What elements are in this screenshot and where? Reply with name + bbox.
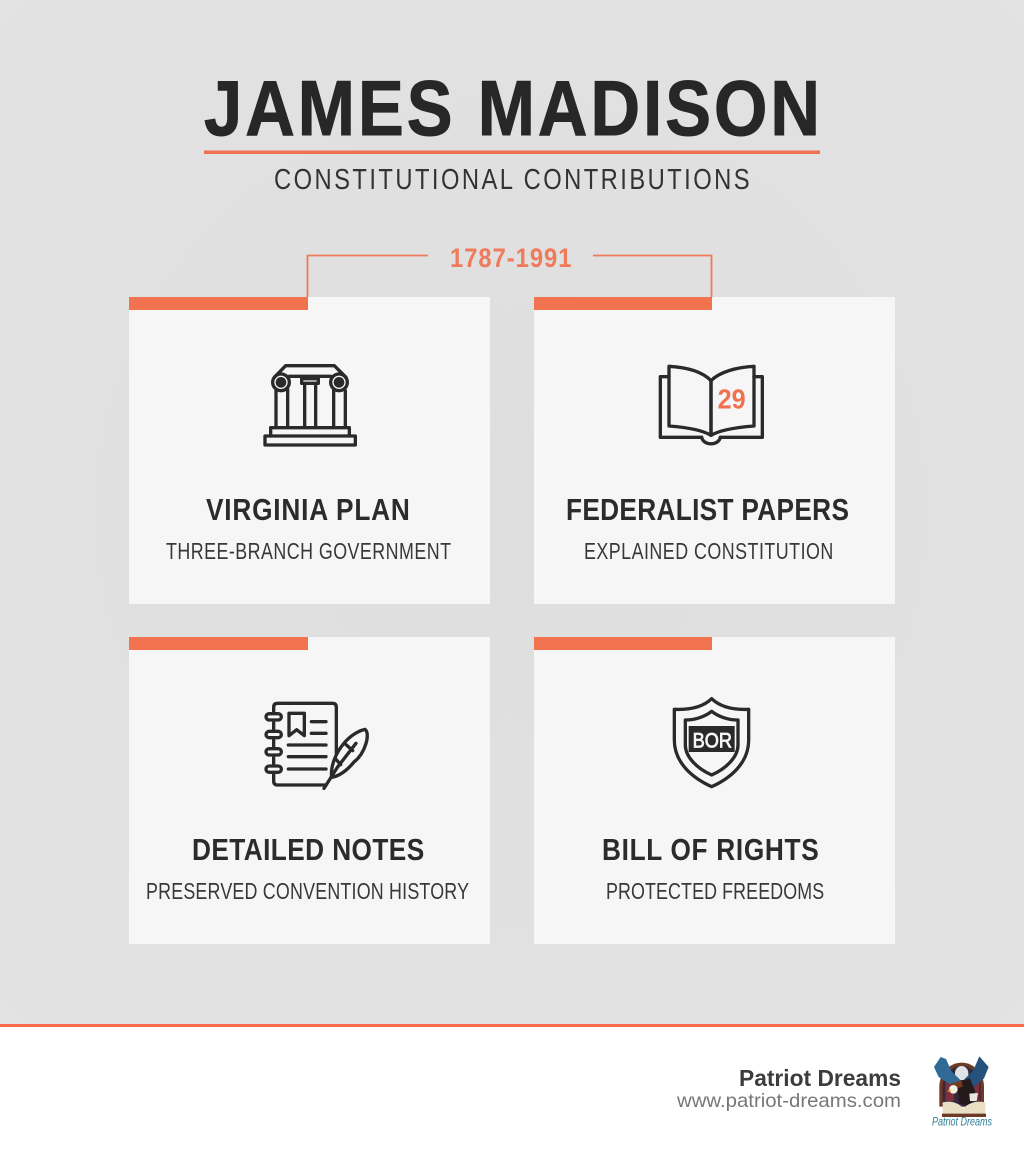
- card background: [534, 637, 895, 944]
- accent bar: [129, 637, 308, 650]
- panel: Virginia Plan: [129, 297, 490, 604]
- icon: shield: [674, 699, 749, 787]
- card heading: BILL OF RIGHTS: [602, 833, 819, 868]
- subtitle: CONSTITUTIONAL CONTRIBUTIONS: [274, 163, 750, 196]
- card heading: DETAILED NOTES: [192, 833, 424, 868]
- website: www.patriot-dreams.com: [676, 1090, 901, 1112]
- icon: open book: 29: [718, 383, 746, 414]
- brand name: Patriot Dreams: [739, 1065, 901, 1091]
- panel: Federalist Papers: [534, 297, 895, 604]
- card background: [534, 297, 895, 604]
- logo: eagle over open book: [932, 1056, 992, 1128]
- date range connector: [308, 244, 712, 297]
- panel: Detailed Notes: [129, 637, 490, 944]
- card description: EXPLAINED CONSTITUTION: [584, 539, 833, 565]
- title underline: [204, 150, 820, 154]
- icon: shield: BOR: [693, 727, 732, 752]
- card description: PROTECTED FREEDOMS: [606, 879, 824, 905]
- footer background: [0, 1024, 1024, 1154]
- footer rule: [0, 1024, 1024, 1027]
- right connector line: [593, 256, 712, 297]
- card background: [129, 297, 490, 604]
- accent bar: [129, 297, 308, 310]
- card description: PRESERVED CONVENTION HISTORY: [146, 879, 469, 905]
- icon: classical temple: [265, 366, 355, 445]
- card description: THREE-BRANCH GOVERNMENT: [166, 539, 451, 565]
- left connector line: [308, 256, 428, 297]
- panel: Bill of Rights: [534, 637, 895, 944]
- logo: eagle over open book: Patriot Dreams: [932, 1114, 992, 1128]
- icon: notebook and quill: [266, 703, 367, 788]
- card background: [129, 637, 490, 944]
- icon: open book: [660, 366, 762, 444]
- accent bar: [534, 297, 712, 310]
- card heading: FEDERALIST PAPERS: [566, 493, 849, 528]
- date range: 1787-1991: [450, 244, 571, 273]
- footer: [0, 1024, 1024, 1154]
- card heading: VIRGINIA PLAN: [206, 493, 410, 528]
- title: JAMES MADISON: [204, 64, 820, 152]
- accent bar: [534, 637, 712, 650]
